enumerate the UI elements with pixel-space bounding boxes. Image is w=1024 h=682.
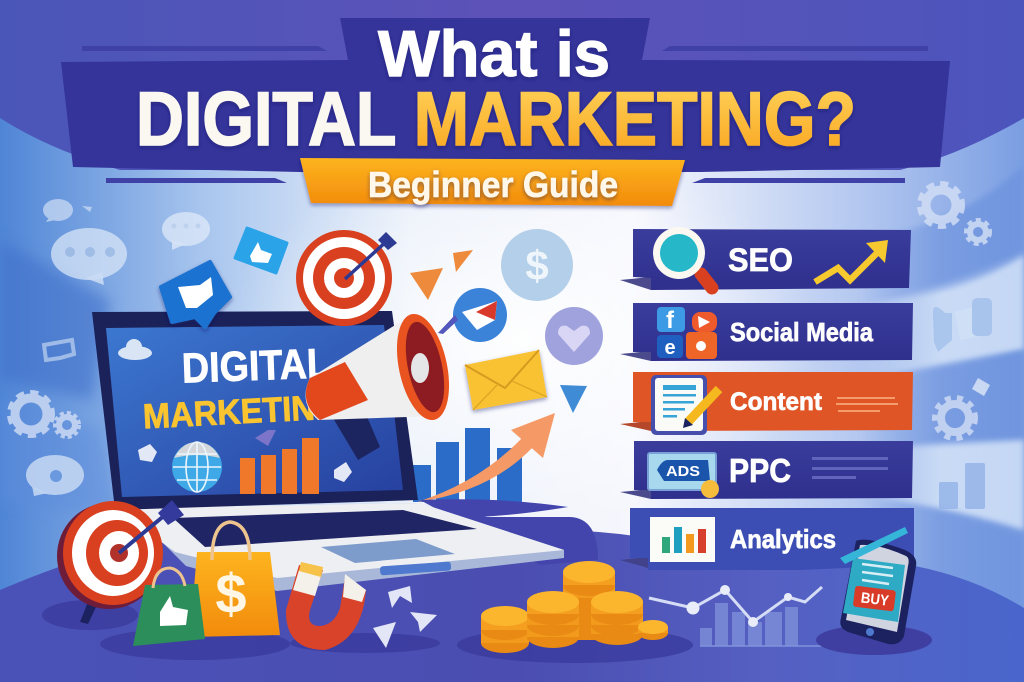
icon: chat bubble dots large — [51, 228, 127, 285]
icons: small shapes on screen — [138, 430, 352, 482]
icon: ads card — [648, 453, 719, 498]
item: PPC — [620, 441, 913, 499]
icon: document and pencil — [651, 375, 719, 435]
icon: cloud — [118, 339, 152, 360]
icon: megaphone — [306, 309, 458, 460]
list: marketing channels — [620, 227, 914, 570]
icon: social tiles: f — [666, 307, 675, 334]
title: What is: What is — [378, 17, 610, 90]
icon: line chart — [649, 585, 822, 646]
icon: dollar circle: $ — [525, 242, 549, 289]
icon: gears top right — [920, 184, 990, 244]
bell — [388, 309, 458, 425]
front latch — [380, 561, 451, 575]
icon: social tiles: e — [664, 337, 676, 359]
icon: orange triangles — [410, 250, 473, 300]
icon: gear mid right — [935, 398, 975, 438]
screen heading: DIGITAL: DIGITAL — [181, 339, 331, 392]
banner shape — [61, 18, 950, 172]
icon: small arrows — [373, 586, 437, 648]
icon: speech bubbles — [933, 298, 992, 352]
label: Social Media — [730, 317, 873, 347]
ground shadows — [42, 600, 693, 663]
icon: rising arrow — [815, 240, 888, 282]
icon: dollar circle — [501, 229, 573, 301]
subtitle: Beginner Guide — [368, 164, 618, 205]
decorative ribbons — [82, 46, 928, 183]
icon: blue triangle — [560, 385, 587, 413]
icon: orange shopping bag: $ — [215, 562, 247, 625]
item: SEO — [620, 227, 911, 290]
icon: thumbs-up bubble large — [161, 262, 230, 327]
subtitle ribbon — [300, 158, 685, 206]
label: SEO — [728, 242, 793, 278]
back stack — [563, 561, 615, 640]
icon: envelope — [465, 350, 547, 410]
decorative text lines — [836, 397, 898, 412]
decorative lines — [862, 564, 893, 584]
icon: coin stacks — [481, 561, 668, 653]
icon: chat bubble clock — [43, 199, 92, 222]
icon: social tiles — [657, 307, 717, 359]
faint background icons: right — [920, 184, 992, 509]
keyboard — [173, 510, 477, 547]
faint background icons: left — [10, 199, 210, 496]
icon: bars — [939, 463, 985, 509]
icon: target bottom-left — [57, 500, 184, 624]
middle stack — [527, 591, 579, 648]
title banner — [61, 17, 950, 206]
icon: gears — [10, 393, 79, 437]
laptop base — [115, 503, 564, 591]
laptop screen frame — [92, 311, 418, 510]
BUY badge: BUY — [860, 589, 890, 610]
decorative shape cluster around megaphone — [410, 229, 603, 502]
icon: thumbs-up tile small — [235, 228, 287, 273]
left stack — [481, 606, 529, 653]
label: PPC — [729, 452, 791, 489]
icon: paper plane circle — [438, 288, 507, 342]
trackpad — [321, 539, 455, 563]
laptop — [92, 311, 598, 591]
right stack — [591, 591, 643, 645]
icon: heart circle — [545, 307, 603, 365]
screen heading: MARKETING: MARKETIN — [142, 389, 316, 437]
item: Analytics — [620, 508, 914, 570]
item: Content — [620, 372, 913, 435]
icon: ads card: ADS — [666, 463, 700, 480]
icon: magnet — [286, 562, 366, 650]
screen — [106, 325, 403, 497]
handle — [333, 412, 380, 460]
decorative text lines — [812, 457, 888, 479]
laptop back shape — [420, 499, 598, 565]
icon: phone with BUY — [816, 527, 932, 655]
item: Social Media — [620, 303, 913, 361]
icon: blue bars — [413, 428, 522, 502]
icon: monitor outline — [44, 340, 74, 360]
icon: chat bubble thumb — [26, 455, 84, 496]
label: Content — [730, 388, 823, 416]
decorative brush stroke — [840, 527, 908, 564]
arrow: growth — [417, 413, 555, 502]
icon: target top with arrow — [296, 230, 397, 326]
bar chart on screen — [240, 438, 319, 494]
icon: orange shopping bag — [190, 522, 280, 637]
small coin — [638, 620, 668, 640]
icon: diamond — [972, 378, 990, 396]
icon: globe — [172, 442, 222, 492]
icon: green shopping bag — [133, 568, 205, 646]
icon: bar chart card — [650, 517, 715, 562]
title: DIGITAL MARKETING?: DIGITAL MARKETING? — [136, 77, 856, 162]
label: Analytics — [730, 524, 836, 554]
icon: magnifier — [653, 227, 712, 288]
body — [306, 322, 438, 420]
icon: chat bubble dots small — [162, 212, 210, 250]
